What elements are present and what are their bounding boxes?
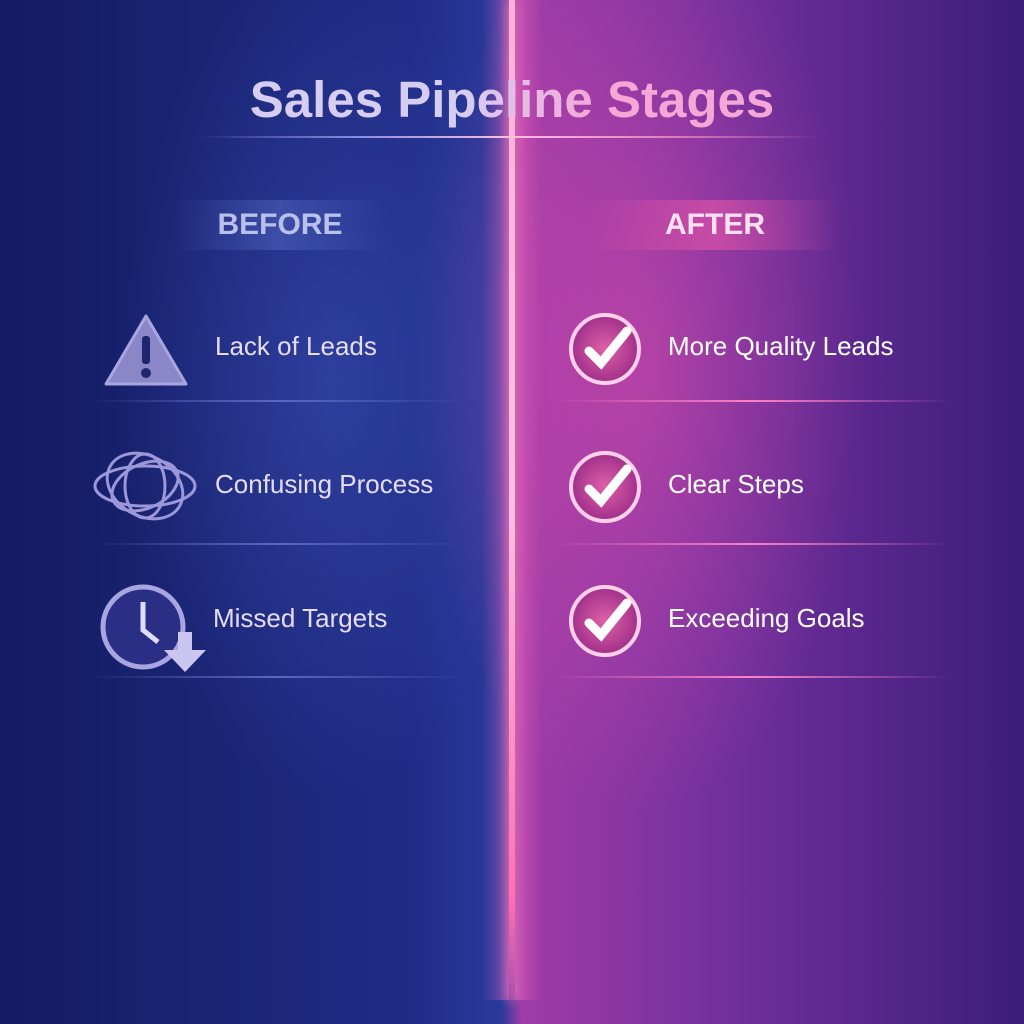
header: before: BEFORE — [217, 208, 342, 241]
text: confusing: Confusing Process — [215, 469, 433, 499]
text: Exceeding Goals — [668, 603, 865, 633]
icon: tangle — [94, 452, 196, 520]
icon: clock down — [100, 584, 206, 672]
text: right items: More Quality Leads — [668, 331, 893, 361]
title — [0, 70, 1024, 129]
center glow line — [482, 0, 542, 1000]
icon: warning — [104, 314, 188, 386]
header: after: AFTER — [665, 208, 765, 241]
text: missed: Missed Targets — [213, 603, 387, 633]
title: Sales Pipeline Stages — [250, 71, 774, 128]
header: before — [175, 200, 385, 250]
header: after — [590, 200, 840, 250]
text: Clear Steps — [668, 469, 804, 499]
text: lack of leads: Lack of Leads — [215, 331, 377, 361]
check icons — [569, 313, 641, 657]
